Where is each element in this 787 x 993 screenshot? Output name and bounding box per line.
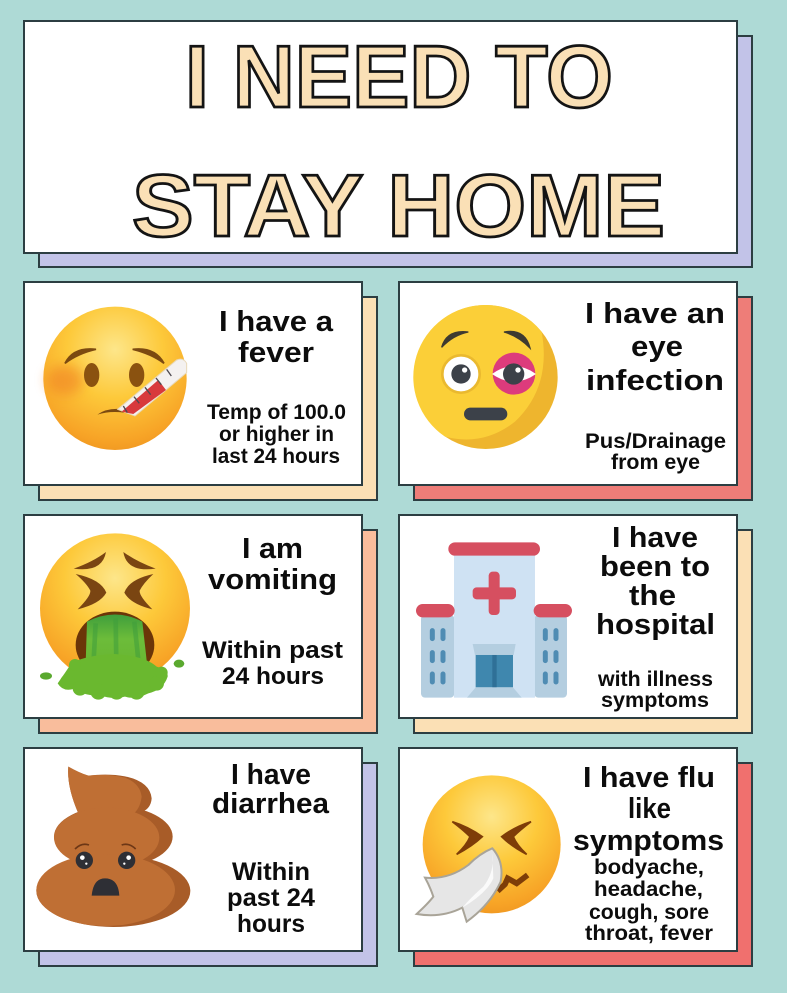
text: flu detail: [585, 856, 713, 945]
text: fever detail: Temp of 100.0: [207, 401, 346, 424]
text: flu heading: I have flu: [583, 762, 715, 794]
text: hospital heading: hospital: [596, 609, 715, 641]
text: vomiting heading: I am: [242, 533, 303, 565]
panel: flu symptoms: [399, 748, 752, 966]
text: vomiting detail: Within past: [202, 637, 343, 664]
text: hospital heading: been to: [600, 551, 710, 583]
sub-icon: bile splash: [40, 654, 184, 700]
text: hospital detail: with illness: [597, 668, 713, 691]
text: vomiting heading: vomiting: [208, 564, 337, 596]
text: fever detail: or higher in: [219, 423, 334, 446]
panel: diarrhea: [24, 748, 377, 966]
text: eye detail: Pus/Drainage: [585, 430, 726, 453]
text: fever heading: fever: [238, 337, 314, 369]
text: hospital heading: the: [629, 580, 676, 612]
text: eye heading: [585, 298, 725, 397]
text: flu heading: symptoms: [573, 825, 724, 857]
text: flu detail: headache,: [594, 878, 703, 901]
icon: hospital building: [416, 542, 572, 698]
text: vomiting detail: 24 hours: [222, 663, 324, 690]
text: flu detail: cough, sore: [589, 901, 709, 924]
panel: fever: [24, 282, 377, 500]
title: I need to stay home: [132, 27, 665, 255]
panel: hospital: [399, 515, 752, 733]
text: diarrhea heading: [212, 759, 330, 820]
text: eye heading: eye: [631, 331, 683, 363]
icon: face with infected eye: [413, 305, 558, 449]
text: eye detail: [585, 430, 726, 474]
text: diarrhea detail: past 24: [227, 884, 315, 912]
text: eye heading: I have an: [585, 298, 725, 330]
text: flu heading: [573, 762, 724, 857]
icon: poop with sad face: [36, 767, 190, 927]
text: diarrhea detail: hours: [237, 910, 305, 938]
title: I need to stay home: STAY HOME: [132, 156, 665, 255]
sub-icon: poop shadow layer: [36, 767, 190, 927]
text: fever heading: [219, 306, 334, 369]
text: flu detail: bodyache,: [594, 856, 704, 879]
text: diarrhea detail: Within: [232, 858, 310, 886]
text: hospital detail: [597, 668, 713, 712]
icon: sneezing face with tissue: [417, 775, 561, 922]
icon: vomiting face: [40, 533, 190, 700]
text: fever heading: I have a: [219, 306, 334, 338]
text: eye heading: infection: [586, 365, 724, 397]
text: diarrhea heading: I have: [231, 759, 311, 791]
icon: face with thermometer: [43, 307, 187, 450]
title: I need to stay home: I NEED TO: [185, 27, 613, 126]
text: flu heading: like: [628, 793, 671, 825]
text: hospital detail: symptoms: [601, 689, 709, 712]
text: diarrhea heading: diarrhea: [212, 788, 330, 820]
text: vomiting heading: [208, 533, 337, 596]
text: fever detail: [207, 401, 346, 468]
sub-icon: poop main layer: [36, 767, 175, 926]
panel: eye infection: [399, 282, 752, 500]
text: hospital heading: I have: [612, 522, 698, 554]
text: hospital heading: [596, 522, 715, 641]
panel: title banner: [24, 21, 752, 267]
text: diarrhea detail: [227, 858, 315, 938]
panel: vomiting: [24, 515, 377, 733]
text: flu detail: throat, fever: [585, 922, 713, 945]
text: fever detail: last 24 hours: [212, 445, 340, 468]
text: eye detail: from eye: [611, 451, 700, 474]
text: vomiting detail: [202, 637, 343, 690]
